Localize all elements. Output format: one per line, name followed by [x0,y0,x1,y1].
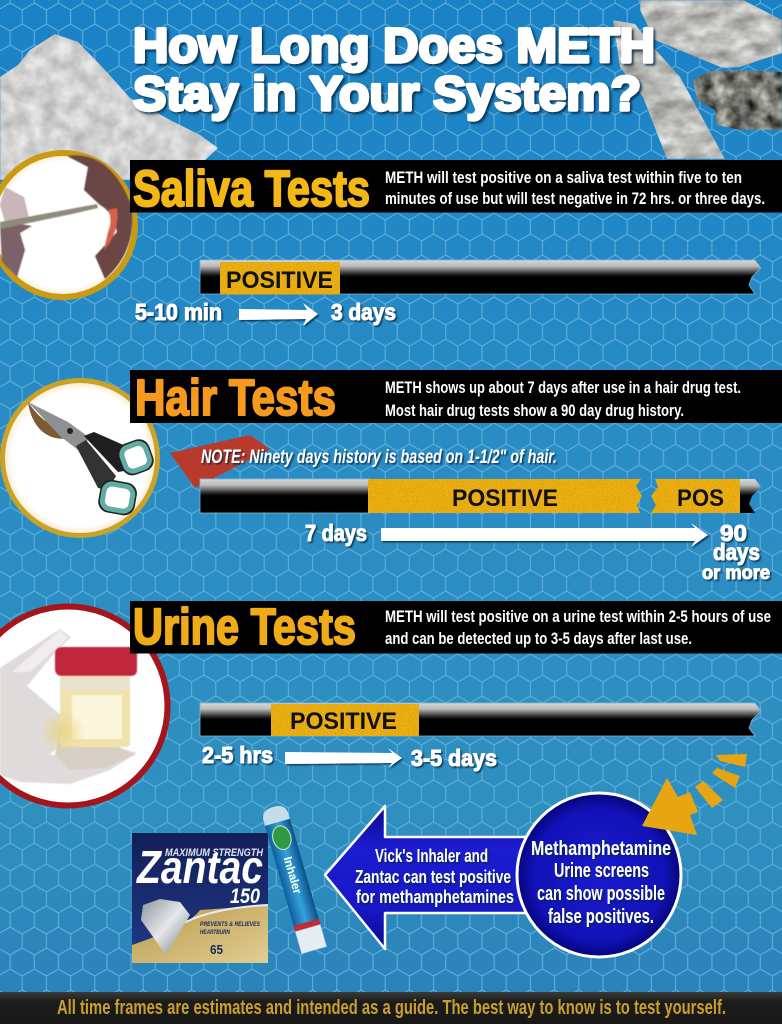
timeline labels: saliva [135,299,396,326]
chart: hair timeline bar [200,479,761,513]
timeline labels: hair [305,520,770,584]
text: callout: can show possible [537,883,665,905]
image: powder pile [0,34,218,180]
heading: urine tests: Urine Tests [133,598,356,655]
chart: urine timeline bar [200,703,761,736]
text: callout: Urine screens [554,860,649,882]
text: 150: 150 [230,885,260,908]
icon: scissors circle [2,380,158,536]
footer [0,992,782,1024]
icon: yellow arrow with dashes [642,754,747,835]
timeline labels: urine: 2-5 hrs [202,742,273,768]
text: note: NOTE: Ninety days history is based on 1-1/2" of hair. [201,447,557,468]
positive segment [368,479,642,513]
text: arrow callout: Vick's Inhaler and [375,845,488,866]
text: hair description [385,379,741,420]
text: urine description [385,608,771,648]
timeline labels: saliva: 5-10 min [135,299,222,325]
panel: urine tests header [130,598,782,655]
positive segment continued [651,479,740,513]
timeline labels: hair: days [713,539,760,565]
text: callout [531,838,671,928]
text: inhaler: Inhaler [281,855,305,896]
positive segment: POSITIVE [452,485,558,512]
text: maximum strength: MAXIMUM STRENGTH [165,847,264,859]
positive segment continued: POS [677,485,724,512]
icon: blue arrow callout [325,806,535,949]
timeline labels: hair: 7 days [305,520,367,546]
text: arrow callout [355,845,514,907]
icon: note tag [170,435,270,488]
text: heartburn: HEARTBURN [200,929,230,936]
timeline labels: hair: 90 [720,520,747,546]
title [133,20,655,121]
text: zantac: Zantac [135,841,263,893]
timeline labels: saliva: 3 days [331,299,396,325]
heading: hair tests: Hair Tests [135,369,336,426]
text: urine description: and can be detected up to 3-5 days after last use. [385,630,692,648]
title: How Long Does METH [133,20,655,73]
panel: hair tests header [130,369,782,426]
positive segment: POSITIVE [226,267,333,294]
panel: saliva tests header [130,160,782,217]
image: zantac box [132,833,268,963]
image: meth crystals [613,0,782,159]
text: prevents and relieves: PREVENTS & RELIEVES [200,921,261,928]
icon: urine cup circle [0,606,168,806]
text: arrow callout: Zantac can test positive [355,866,511,887]
text: callout: Methamphetamine [531,838,671,860]
callout: false positives circle [517,793,681,957]
timeline labels: hair: or more [702,563,770,584]
text: arrow callout: for methamphetamines [356,886,514,907]
positive segment [271,704,419,736]
text: hair description: Most hair drug tests show a 90 day drug history. [385,402,684,420]
title: Stay in Your System? [133,68,641,121]
image: vicks inhaler [261,803,327,954]
icon: saliva test circle [0,153,135,297]
text: saliva description [385,169,765,208]
heading: saliva tests: Saliva Tests [133,160,370,217]
timeline labels: urine [202,742,497,771]
timeline labels: urine: 3-5 days [411,745,497,771]
chart: saliva timeline bar [200,260,761,294]
positive segment: POSITIVE [290,708,397,735]
text: callout: false positives. [548,906,654,928]
text: 65 tablets: 65 [210,942,223,957]
